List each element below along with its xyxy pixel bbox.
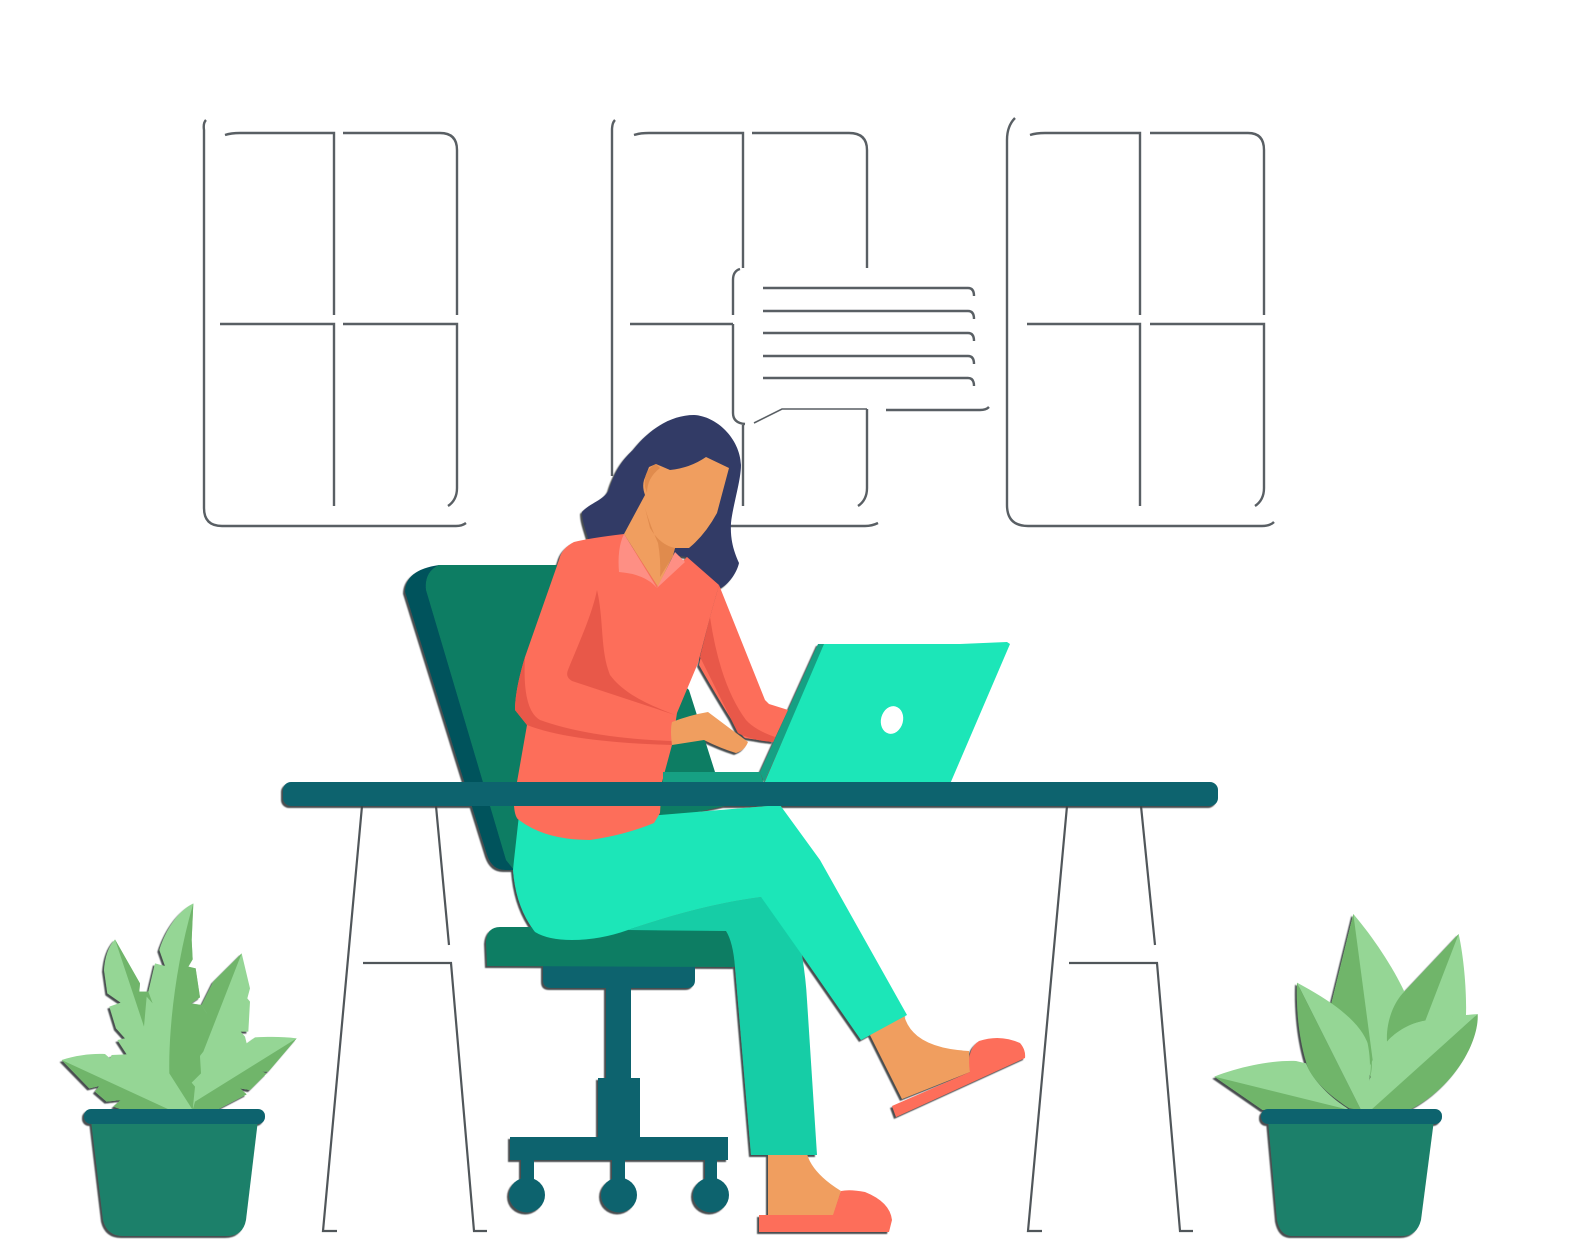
sleeve shadow: [515, 657, 672, 745]
window: middle: [612, 120, 878, 526]
chair back: [405, 565, 725, 870]
desk top: [283, 782, 1218, 806]
chair seat: [486, 927, 735, 967]
window: right: [1007, 118, 1274, 526]
speech bubble with text lines: [733, 269, 989, 424]
plant: right: [1214, 914, 1478, 1110]
figure group: chair, woman, laptop and desk: [62, 415, 1478, 1236]
hand: [671, 712, 748, 753]
leaves: right plant: [1331, 914, 1404, 1080]
pot: left: [84, 1109, 265, 1236]
desk leg: left: [323, 806, 487, 1231]
laptop: [663, 642, 1010, 784]
far arm: [699, 585, 788, 742]
plant: left: [62, 903, 297, 1110]
face and neck: [624, 457, 729, 587]
torso: [514, 534, 719, 840]
pot: right: [1261, 1109, 1442, 1236]
leaves: left plant: [62, 903, 297, 1110]
desk leg: right: [1028, 806, 1193, 1231]
sweater folds: [567, 590, 675, 715]
collar: [619, 534, 685, 588]
chair base with wheels: [509, 960, 729, 1212]
raised leg and slipper: [513, 805, 1025, 1117]
hair: [582, 415, 741, 588]
window: left: [204, 120, 466, 526]
lower leg and foot: [628, 897, 892, 1232]
